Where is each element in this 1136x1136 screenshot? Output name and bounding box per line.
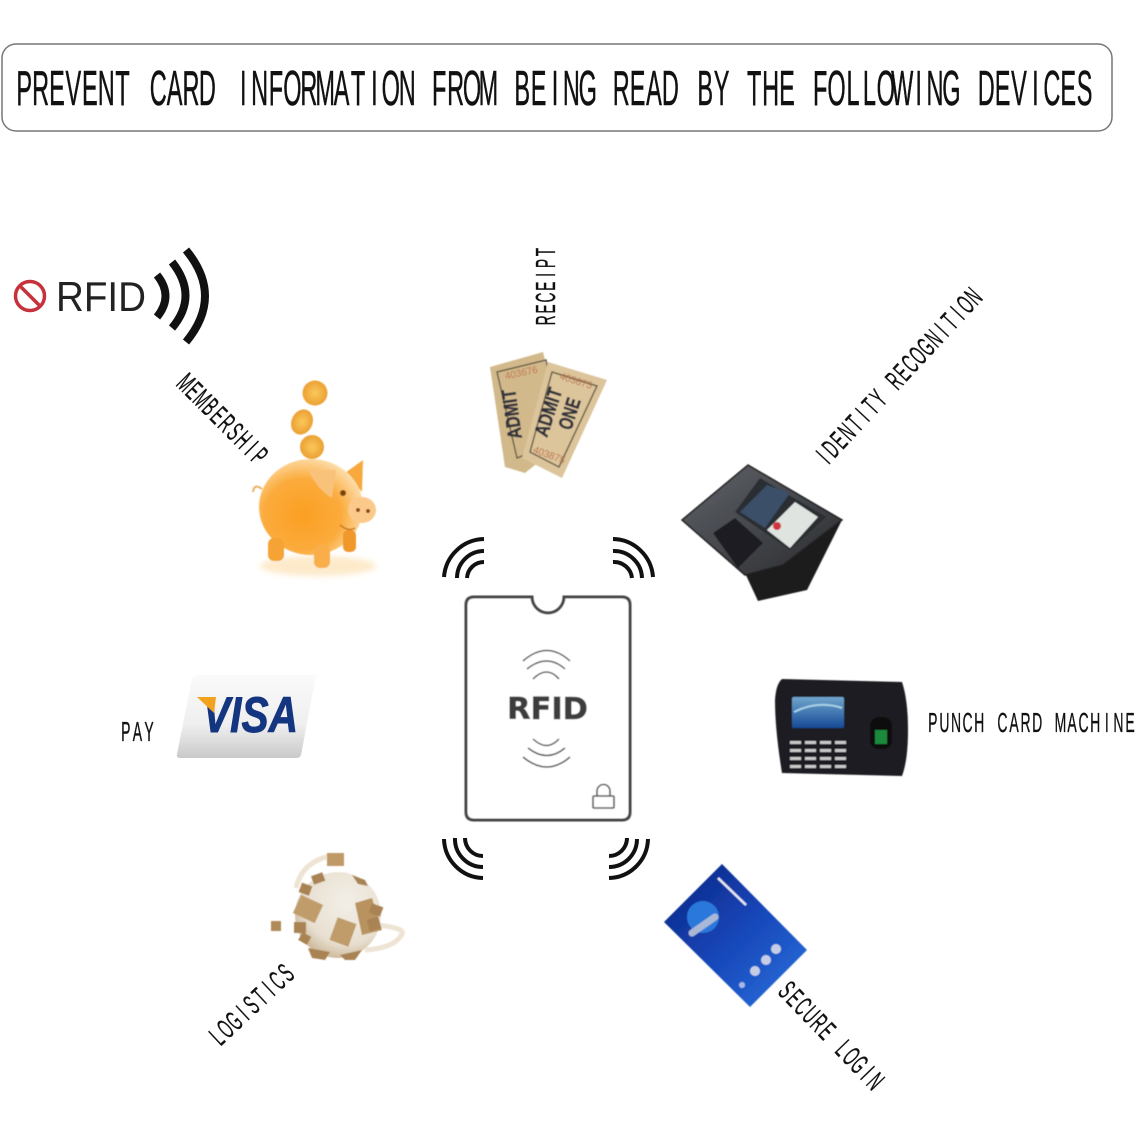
RFID text: RFID xyxy=(507,692,588,727)
label: membership: MEMBERSHIP xyxy=(171,367,274,471)
top signal arcs xyxy=(523,650,570,679)
icon: signal waves top right xyxy=(613,539,653,578)
icon: piggy bank xyxy=(253,380,376,576)
parcels on the globe xyxy=(293,872,383,960)
icon: admit one tickets xyxy=(490,352,607,478)
icon: face recognition terminal xyxy=(682,465,842,601)
label: secure login: SECURE LOGIN xyxy=(772,975,890,1096)
back ticket: 403676 xyxy=(504,365,539,382)
icon: signal waves bottom right xyxy=(609,838,648,878)
front ticket: 403875 xyxy=(531,445,567,467)
front ticket: 403675 xyxy=(558,371,594,392)
title: PREVENT CARD INFORMATION FROM BEING READ BY THE FOLLOWING DEVICES xyxy=(16,62,1092,116)
icon: globe of parcels xyxy=(271,853,402,960)
header box xyxy=(2,44,1112,131)
icon: secure login blue card xyxy=(664,864,807,1007)
icon: signal waves bottom left xyxy=(444,838,483,878)
label: punch card machine: PUNCH CARD MACHINE xyxy=(928,707,1135,738)
icon: visa card: VISA xyxy=(203,687,298,743)
label: logistics: LOGISTICS xyxy=(203,958,300,1051)
icon: no RFID logo: RFID xyxy=(56,273,146,320)
icon: visa card xyxy=(177,675,316,758)
back ticket xyxy=(490,352,566,473)
bottom signal arcs xyxy=(523,739,570,767)
icon: signal waves top left xyxy=(444,539,484,578)
icon: padlock xyxy=(593,785,614,808)
front ticket: ONE xyxy=(555,395,586,433)
panel: RFID sleeve xyxy=(466,597,630,820)
icon: no RFID logo xyxy=(16,250,205,342)
label: identity recognition: IDENTITY RECOGNITION xyxy=(810,282,988,469)
keypad xyxy=(790,741,846,768)
front ticket xyxy=(522,362,607,478)
label: receipt: RECEIPT xyxy=(530,248,561,325)
icon: fingerprint punch card machine xyxy=(775,679,908,776)
front ticket: ADMIT xyxy=(531,385,567,440)
label: pay: PAY xyxy=(121,716,154,747)
back ticket: ADMIT xyxy=(498,388,527,440)
